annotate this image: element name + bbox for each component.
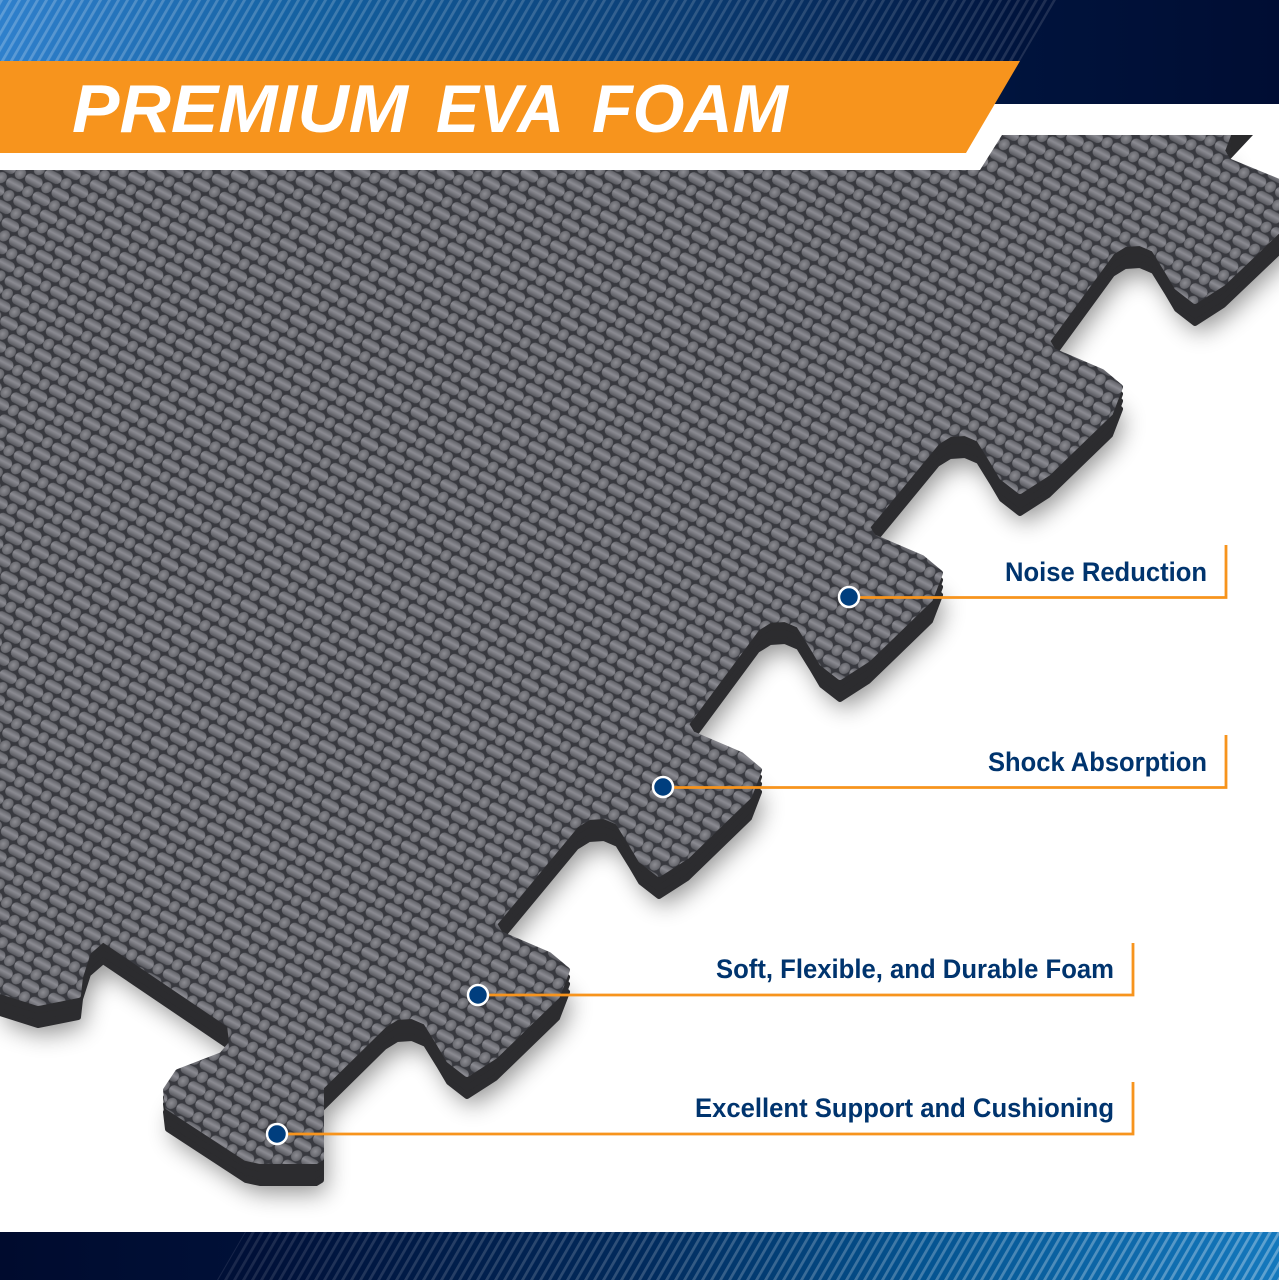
callout: Noise Reduction xyxy=(839,545,1226,607)
callout: Shock Absorption: Shock Absorption xyxy=(988,747,1207,777)
white ribbon under header xyxy=(0,104,1279,170)
title: FOAM xyxy=(592,71,789,147)
title: EVA xyxy=(436,71,564,147)
title: PREMIUM xyxy=(72,71,409,147)
header band xyxy=(0,0,1279,104)
callout: Soft, Flexible, and Durable Foam xyxy=(468,943,1133,1005)
title banner xyxy=(0,61,1020,153)
callout: Shock Absorption xyxy=(653,735,1226,797)
callout: Excellent Support and Cushioning: Excellent Support and Cushioning xyxy=(695,1093,1114,1123)
callout: Soft, Flexible, and Durable Foam: Soft, Flexible, and Durable Foam xyxy=(716,954,1114,984)
title xyxy=(72,71,789,147)
callout: Noise Reduction: Noise Reduction xyxy=(1005,557,1207,587)
callout: Excellent Support and Cushioning xyxy=(267,1082,1133,1144)
footer band xyxy=(0,1232,1279,1280)
